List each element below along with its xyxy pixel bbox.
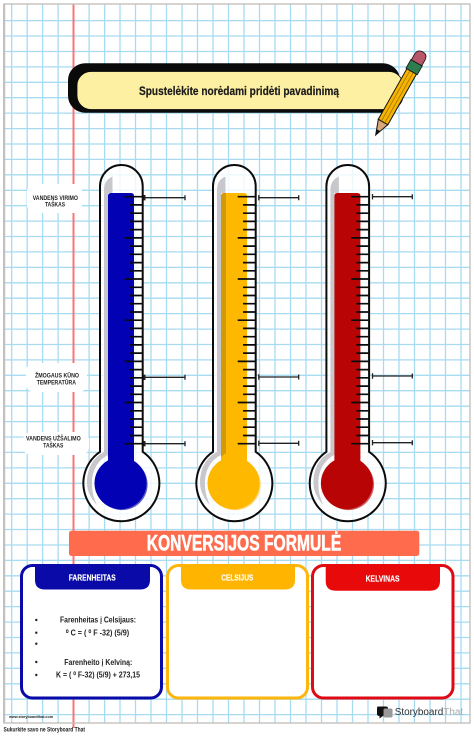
panel: Celsius: CELSIJUS xyxy=(221,573,254,583)
title banner xyxy=(68,63,403,113)
label: water boiling point xyxy=(27,184,82,213)
marker lines xyxy=(372,194,412,445)
panel: Fahrenheit: FARENHEITAS xyxy=(69,573,116,583)
heading: conversion formulas: KONVERSIJOS FORMULĖ xyxy=(147,531,341,556)
formula list xyxy=(35,616,140,680)
label: human body temperature: TEMPERATŪRA xyxy=(37,378,76,386)
panel: Kelvin xyxy=(312,564,453,698)
label: water freezing point xyxy=(23,432,89,455)
title text: Spustelėkite norėdami pridėti pavadinimą xyxy=(139,84,339,98)
label: human body temperature xyxy=(26,363,87,392)
marker lines xyxy=(258,195,299,446)
thermometer: red xyxy=(310,165,412,521)
footer credit: Sukurkite savo ne Storyboard That xyxy=(4,726,85,733)
label: human body temperature: ŽMOGAUS KŪNO xyxy=(35,371,79,380)
formula list: K = ( ⁰ F-32) (5/9) + 273,15 xyxy=(56,671,140,680)
thermometer: blue xyxy=(83,165,185,521)
formula list: Farenheito į Kelviną: xyxy=(64,658,132,667)
watermark url: www.storyboardthat.com xyxy=(8,714,53,719)
panel: Fahrenheit xyxy=(22,564,162,698)
formula list: Farenheitas į Celsijaus: xyxy=(60,616,136,625)
marker lines xyxy=(144,195,185,446)
formula list: ⁰ C = ( ⁰ F -32) (5/9) xyxy=(66,628,129,637)
label: water boiling point: VANDENS VIRIMO xyxy=(33,195,78,202)
icon: pencil xyxy=(370,49,428,138)
panel: Celsius xyxy=(168,564,308,698)
label: water freezing point: TAŠKAS xyxy=(43,440,64,449)
thermometer: yellow xyxy=(196,165,299,521)
label: water freezing point: VANDENS UŽŠALIMO xyxy=(26,434,81,443)
label: water boiling point: TAŠKAS xyxy=(45,200,65,209)
panel: Kelvin: KELVINAS xyxy=(366,574,400,584)
logo: Storyboard That: StoryboardThat xyxy=(395,707,463,718)
